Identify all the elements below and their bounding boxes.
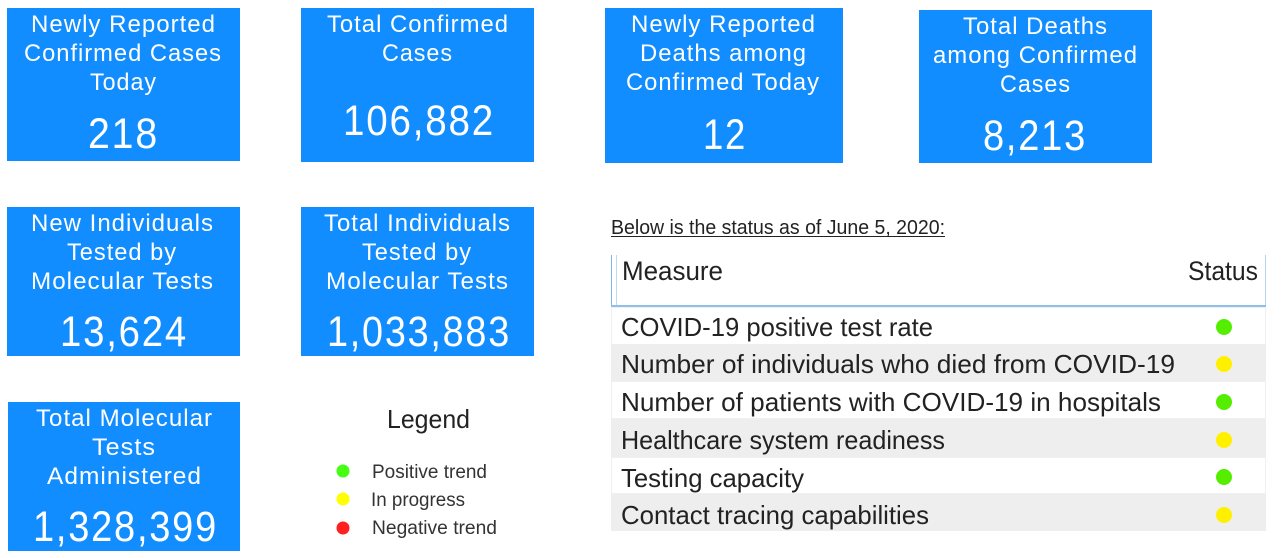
card: newly reported deaths: Deaths among — [640, 40, 807, 67]
card: newly reported confirmed cases: Today — [90, 69, 157, 96]
card: total molecular tests: Administered — [47, 463, 202, 490]
card: total molecular tests: Total Molecular — [36, 405, 213, 432]
row: testing capacity — [612, 458, 1266, 494]
card: new individuals tested: Tested by — [67, 239, 177, 266]
card: total deaths: among Confirmed — [933, 42, 1138, 69]
card: total individuals tested — [301, 207, 534, 356]
row: deaths: Number of individuals who died from COVID-19 — [621, 349, 1175, 379]
card: newly reported confirmed cases: 218 — [88, 110, 159, 158]
card: total deaths: 8,213 — [983, 112, 1087, 160]
legend title: Legend — [387, 404, 470, 434]
status date heading: Below is the status as of June 5, 2020: — [611, 217, 945, 239]
card: total individuals tested: Tested by — [362, 239, 472, 266]
card: total individuals tested: Molecular Tests — [326, 268, 509, 295]
table header: Measure — [622, 256, 723, 286]
row: contact tracing — [611, 494, 1266, 531]
row: testing capacity: Testing capacity — [621, 463, 804, 493]
card: newly reported deaths: Confirmed Today — [626, 69, 820, 96]
card: total confirmed cases: 106,882 — [343, 97, 495, 145]
legend item: positive trend: Positive trend — [372, 462, 487, 483]
card: newly reported deaths: 12 — [703, 111, 747, 159]
card: total molecular tests: 1,328,399 — [33, 503, 218, 551]
card: newly reported confirmed cases: Confirmed Cases — [24, 40, 222, 67]
card: total confirmed cases: Cases — [382, 40, 453, 67]
card: total individuals tested: 1,033,883 — [327, 308, 511, 356]
row: healthcare readiness: Healthcare system readiness — [621, 425, 945, 455]
row: positive test rate: COVID-19 positive test rate — [621, 312, 933, 342]
card: newly reported deaths: Newly Reported — [631, 11, 816, 38]
card: new individuals tested — [7, 207, 240, 356]
table header — [611, 255, 1266, 307]
card: total confirmed cases — [301, 8, 534, 162]
card: total deaths: Total Deaths — [963, 13, 1108, 40]
card: total deaths — [919, 10, 1152, 163]
row: hospitals: Number of patients with COVID-19 in hospitals — [621, 387, 1161, 417]
card: total confirmed cases: Total Confirmed — [327, 11, 509, 38]
row: positive test rate — [612, 308, 1266, 344]
row: deaths — [611, 344, 1266, 381]
card: total molecular tests — [8, 402, 240, 551]
card: newly reported confirmed cases — [7, 8, 240, 161]
legend item: negative trend: Negative trend — [372, 518, 497, 539]
row: hospitals — [612, 382, 1266, 418]
card: total molecular tests: Tests — [92, 434, 156, 461]
card: total individuals tested: Total Individuals — [324, 210, 511, 237]
card: new individuals tested: New Individuals — [31, 210, 214, 237]
table header: Status — [1188, 256, 1258, 286]
card: newly reported confirmed cases: Newly Reported — [31, 11, 216, 38]
status table — [611, 255, 1266, 531]
legend — [336, 404, 497, 539]
card: new individuals tested: Molecular Tests — [31, 268, 214, 295]
row: contact tracing: Contact tracing capabilities — [621, 500, 929, 530]
card: new individuals tested: 13,624 — [60, 308, 188, 356]
legend item: in progress: In progress — [371, 490, 465, 511]
row: healthcare readiness — [611, 419, 1266, 457]
card: newly reported deaths — [605, 8, 843, 163]
card: total deaths: Cases — [1000, 71, 1071, 98]
